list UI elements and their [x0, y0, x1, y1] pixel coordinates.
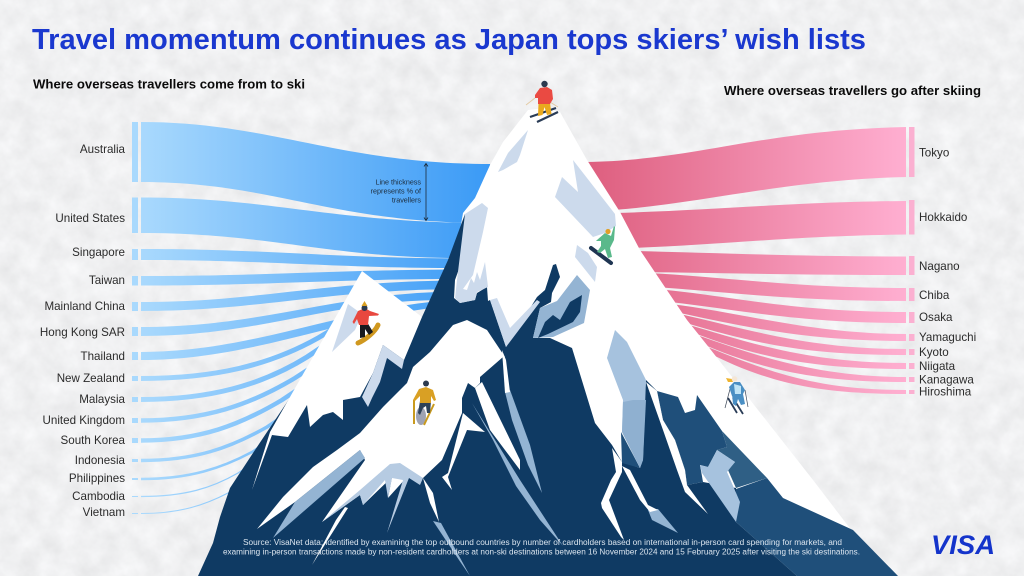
origin labels: Mainland China [44, 300, 126, 313]
flow: Vietnam [141, 482, 245, 514]
origin labels: South Korea [61, 434, 126, 447]
source note: Source: VisaNet data; identified by examining the top outbound countries by number of cardholders based on international in-person card spending for markets, and [243, 538, 842, 547]
illustration: mountains [198, 108, 898, 576]
flow: Indonesia [141, 415, 285, 460]
origin labels: Vietnam [83, 506, 125, 519]
snow shadow patches [455, 130, 740, 522]
destination labels: Yamaguchi [919, 331, 976, 344]
flow: Chiba [645, 273, 906, 301]
destination labels: Niigata [919, 360, 956, 373]
annotation: line thickness: Line thickness [375, 178, 421, 186]
origin labels: United Kingdom [42, 414, 125, 427]
flow: Hokkaido [615, 201, 906, 248]
flow: Osaka [655, 289, 906, 323]
main peak snow [440, 108, 852, 560]
origin labels: Singapore [72, 246, 125, 259]
flow: Thailand [141, 301, 440, 360]
lower snow ridge [257, 320, 505, 529]
sankey: origin flows [141, 122, 500, 514]
flow: Taiwan [141, 270, 460, 286]
destination labels: Nagano [919, 260, 960, 273]
destination labels: Tokyo [919, 146, 949, 160]
origin labels: Malaysia [79, 393, 126, 406]
origin labels: Thailand [81, 350, 125, 363]
ridge shadow strips [273, 390, 678, 576]
destination labels: Chiba [919, 289, 950, 302]
flow: United States [141, 198, 490, 258]
flow: Tokyo [586, 127, 906, 211]
origin labels: Cambodia [72, 490, 126, 503]
origin labels: Philippines [69, 472, 125, 485]
origin labels: Taiwan [89, 274, 125, 287]
flow: Australia [141, 122, 500, 224]
heading: destinations: Where overseas travellers go after skiing [724, 83, 981, 98]
origin labels [40, 143, 126, 519]
right face shaded rock [621, 391, 898, 576]
annotation: line thickness: represents % of [371, 186, 421, 196]
white snow streaks [312, 350, 708, 565]
heading: origins: Where overseas travellers come from to ski [33, 76, 305, 92]
flow: Mainland China [141, 280, 460, 311]
flow: Cambodia [141, 462, 255, 496]
flow: Kanagawa [694, 334, 906, 382]
source note: examining in-person transactions made by non-resident cardholders at non-ski destinations between 16 November 2024 and 15 February 2025 after visiting the ski destinations. [223, 548, 860, 556]
title: Travel momentum continues as Japan tops skiers’ wish lists [32, 24, 866, 56]
destination marker bars [909, 127, 914, 394]
flow: Singapore [141, 249, 470, 268]
flow: Hiroshima [700, 344, 906, 394]
snowboarder: green suit [591, 226, 615, 263]
sankey: destination flows [586, 127, 906, 394]
skier: summit, red jacket [526, 81, 558, 122]
annotation: line thickness [371, 164, 428, 220]
origin labels: New Zealand [57, 372, 125, 385]
origin labels: Australia [80, 143, 126, 156]
flow: Malaysia [141, 345, 325, 400]
flow: United Kingdom [141, 365, 315, 420]
origin labels: United States [55, 212, 125, 225]
Visa logo: VISA [931, 530, 995, 560]
origin marker bars [132, 122, 138, 514]
destination labels: Osaka [919, 311, 953, 324]
skier: blue jacket [725, 376, 748, 414]
flow: Nagano [635, 251, 906, 275]
flow: Niigata [686, 324, 906, 369]
destination labels: Kyoto [919, 346, 949, 359]
small peak snow [252, 271, 422, 490]
destination labels: Kanagawa [919, 374, 974, 386]
origin labels: Hong Kong SAR [40, 326, 125, 339]
flow: Kyoto [680, 314, 906, 355]
flow: Yamaguchi [670, 304, 906, 341]
snowboarder: red jacket [352, 301, 379, 343]
flow: New Zealand [141, 325, 340, 378]
origin labels: Indonesia [75, 454, 126, 467]
skier: yellow jacket [413, 380, 436, 425]
destination labels: Hokkaido [919, 211, 967, 224]
dark mountain body [198, 214, 797, 576]
flow: Hong Kong SAR [141, 292, 440, 336]
destination labels: Hiroshima [919, 386, 972, 398]
flow: Philippines [141, 440, 270, 479]
flow: South Korea [141, 388, 300, 440]
small peak shadows [332, 304, 404, 407]
destination labels [919, 146, 976, 398]
annotation: line thickness: travellers [392, 196, 421, 204]
source note [223, 538, 860, 556]
